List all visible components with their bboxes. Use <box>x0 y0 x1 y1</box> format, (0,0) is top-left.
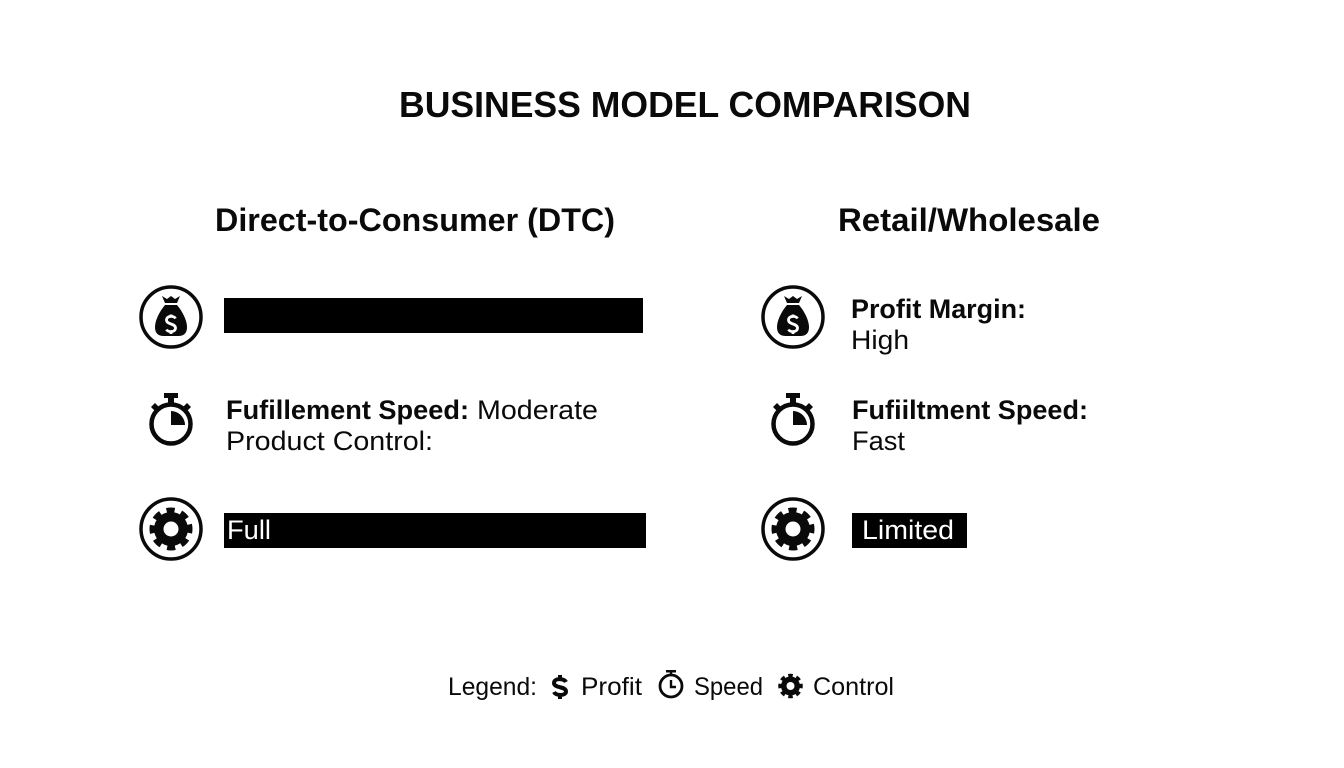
product control bar: limited: Limited <box>862 515 954 545</box>
heading: retail/wholesale: Retail/Wholesale <box>838 202 1100 238</box>
product control bar: limited <box>852 513 967 548</box>
text: profit margin high: High <box>851 325 909 355</box>
legend icon: dollar <box>554 675 566 699</box>
icon: money bag <box>141 287 201 347</box>
legend icon: stopwatch <box>660 670 682 697</box>
text: fulfillment speed and product control <box>226 395 598 456</box>
icon: stopwatch <box>151 393 191 444</box>
heading: direct-to-consumer: Direct-to-Consumer (DTC) <box>215 202 615 238</box>
text: fulfillment speed fast: Fast <box>852 426 905 456</box>
redacted profit margin bar <box>224 298 643 333</box>
text: profit margin high <box>851 294 1026 355</box>
legend <box>448 670 894 701</box>
legend icon: gear <box>780 676 801 696</box>
text: fulfillment speed and product control: Moderate <box>477 395 598 425</box>
legend: Control <box>813 673 894 701</box>
text: fulfillment speed fast <box>852 395 1088 456</box>
icon: stopwatch <box>773 393 813 444</box>
panel: direct-to-consumer <box>141 202 646 559</box>
icon: gear <box>763 499 823 559</box>
icon: gear <box>141 499 201 559</box>
panel: retail/wholesale <box>763 202 1100 559</box>
product control bar: full <box>224 513 646 548</box>
icon: money bag <box>763 287 823 347</box>
text: fulfillment speed and product control: Fufillement Speed: <box>226 395 469 425</box>
title: BUSINESS MODEL COMPARISON <box>399 84 971 125</box>
text: profit margin high: Profit Margin: <box>851 294 1026 324</box>
product control bar: full: Full <box>227 515 271 545</box>
legend: Profit <box>581 673 642 701</box>
legend: Speed <box>694 673 763 701</box>
text: fulfillment speed fast: Fufiiltment Speed: <box>852 395 1088 425</box>
text: fulfillment speed and product control: Product Control: <box>226 426 433 456</box>
legend: Legend: <box>448 673 537 701</box>
